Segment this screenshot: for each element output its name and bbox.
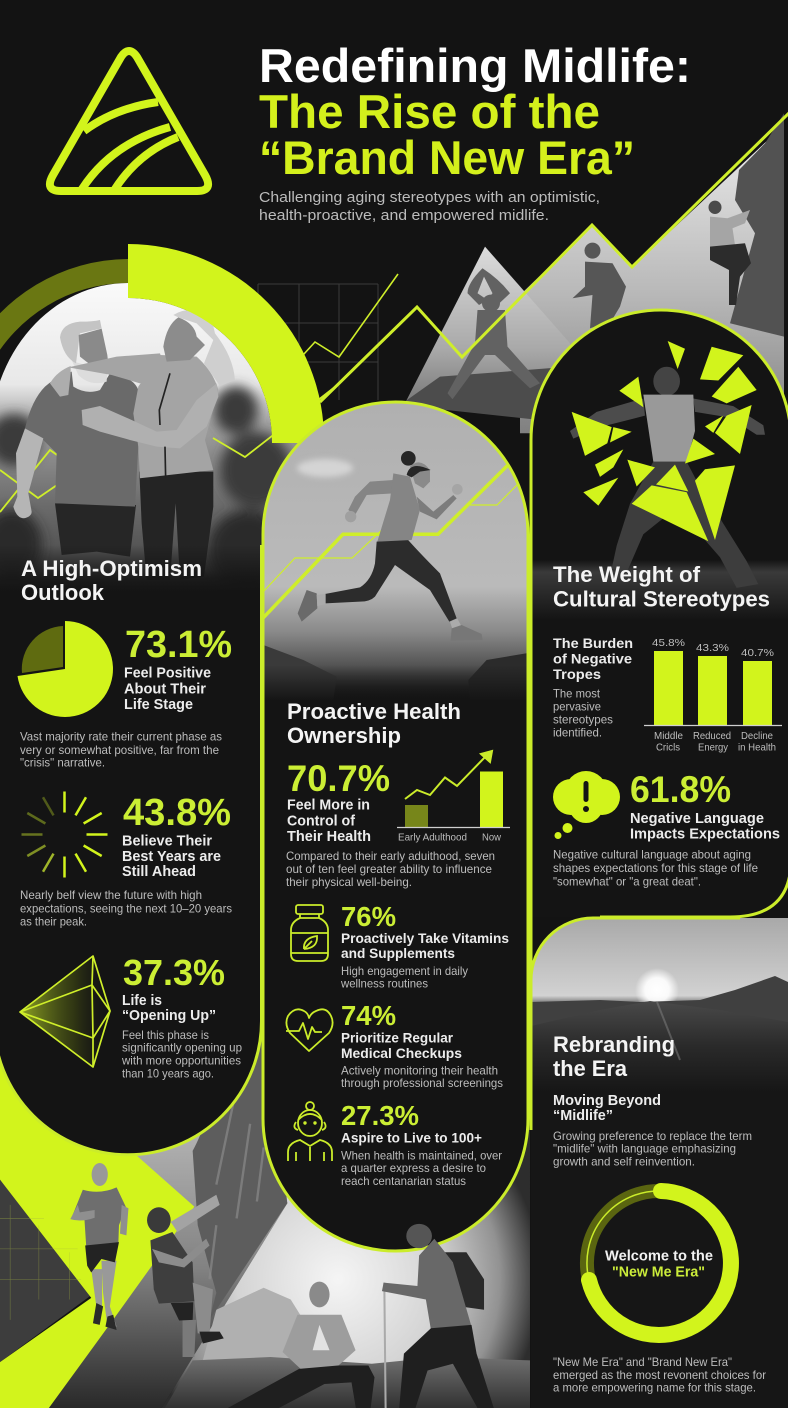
optimism ring lime arc: [128, 244, 324, 443]
man's face: [79, 329, 108, 368]
panel border: [531, 310, 788, 1130]
ring: welcome to the new me era: "New Me Era": [612, 1264, 705, 1281]
panel border: [263, 402, 528, 1251]
ring: welcome to the new me era: [587, 1191, 731, 1335]
heading: Cultural Stereotypes: [553, 586, 770, 612]
woman's jacket: [133, 355, 218, 478]
stat 27.3%: 27.3%: [341, 1100, 419, 1131]
illustration: figure breaking shards: [570, 341, 765, 588]
panel: the weight of cultural stereotypes: [530, 308, 788, 980]
woman's hand on shoulder: [50, 366, 71, 397]
stat 37.3%: Life is: [122, 992, 162, 1009]
stat 37.3%: 37.3%: [123, 952, 225, 993]
bar chart: tropes: 40.7%: [741, 647, 774, 659]
text: burden of negative tropes: Tropes: [553, 666, 601, 682]
heading: [21, 556, 202, 605]
bar chart: tropes: Decline: [741, 730, 773, 742]
stat 43.8%: [20, 792, 232, 928]
stat 43.8%: Still Ahead: [122, 863, 196, 880]
lime chevron: [0, 1016, 194, 1408]
heading: Outlook: [21, 580, 105, 605]
stat 43.8%: 43.8%: [123, 792, 231, 834]
yoga peak: [405, 247, 570, 420]
text: moving beyond midlife: Moving Beyond: [553, 1092, 661, 1109]
woman's upper arm: [68, 353, 167, 383]
stat 61.8%: [553, 769, 780, 889]
stat 37.3%: than 10 years ago.: [122, 1066, 214, 1080]
stat 27.3%: [341, 1100, 502, 1188]
stat 74%: Prioritize Regular: [341, 1030, 454, 1046]
text: burden of negative tropes: pervasive: [553, 700, 601, 714]
text: moving beyond midlife: [553, 1092, 752, 1169]
stat 61.8%: Negative Language: [630, 810, 764, 827]
heading: Ownership: [287, 723, 401, 748]
panel: proactive health ownership: [263, 402, 528, 1251]
title: Redefining Midlife:: [259, 39, 691, 92]
distant peak: [203, 1288, 338, 1360]
bar chart: tropes: Middle: [654, 730, 683, 742]
dark fade below photo: [0, 545, 261, 593]
photo lime lines: [263, 465, 517, 618]
body: control of health: Compared to their early aduithood, seven: [286, 849, 495, 863]
stat 76%: Proactively Take Vitamins: [341, 930, 509, 946]
text: closing note: a more empowering name for this stage.: [553, 1381, 756, 1395]
text: moving beyond midlife: growth and self reinvention.: [553, 1155, 695, 1169]
stat 61.8%: Impacts Expectations: [630, 826, 780, 843]
bar chart: tropes: 45.8%: [652, 637, 685, 649]
yoga figure: [448, 268, 540, 399]
man's shirt: [25, 372, 138, 507]
zipper: [159, 373, 170, 478]
rocks: [264, 646, 330, 674]
stat 76%: 76%: [341, 901, 396, 932]
stat 61.8%: "somewhat" or "a great deat".: [553, 875, 701, 889]
stage floor: [532, 562, 788, 610]
hiker overlapping center panel: [406, 1224, 453, 1266]
icon: sunburst rays: [22, 792, 108, 878]
photo zigzag lines: [0, 383, 340, 512]
figure: [570, 367, 765, 588]
stat 70.7%: Control of: [287, 813, 356, 830]
stat 76%: High engagement in daily: [341, 964, 468, 978]
heading: Proactive Health: [287, 699, 461, 724]
stat 43.8%: Believe Their: [122, 832, 212, 850]
bar chart: tropes: Energy: [698, 742, 729, 754]
text: burden of negative tropes: The Burden: [553, 635, 633, 651]
wedge grid: [0, 1205, 81, 1320]
heading: Rebranding: [553, 1032, 675, 1057]
foreground ridges: [162, 1357, 530, 1408]
hiker figure in header: [572, 243, 626, 328]
woman's hair: [173, 310, 235, 386]
icon: heart pulse: [286, 1009, 333, 1051]
title: [259, 39, 691, 184]
stat 74%: 74%: [341, 1000, 396, 1031]
stat 27.3%: a quarter express a desire to: [341, 1161, 486, 1175]
climber figure: [708, 201, 751, 305]
text: burden of negative tropes: The most: [553, 687, 601, 701]
subtitle: health-proactive, and empowered midlife.: [259, 207, 549, 224]
stat 43.8%: Best Years are: [122, 848, 221, 865]
rock wall: [193, 1022, 287, 1320]
photo: couple scene: [0, 283, 298, 578]
stat 27.3%: When health is maintained, over: [341, 1149, 502, 1163]
stat 70.7%: 70.7%: [287, 758, 390, 799]
heading: [553, 1032, 675, 1081]
heading: The Weight of: [553, 562, 701, 587]
stat 43.8%: Nearly belf view the future with high: [20, 888, 202, 902]
stat 70.7%: Their Health: [287, 828, 371, 845]
runner: [70, 1163, 128, 1330]
stat 61.8%: 61.8%: [630, 769, 731, 810]
stat 73.1%: very or somewhat positive, far from the: [20, 743, 219, 757]
bar chart: tropes: Reduced: [693, 730, 731, 742]
trend arrow: [405, 751, 492, 799]
bar chart: tropes: Cricls: [656, 742, 680, 754]
photo wedge: [0, 1180, 101, 1362]
zigzag growth line: [320, 112, 788, 402]
rising thin line: [213, 274, 398, 453]
panel: a high-optimism outlook: [0, 244, 340, 1155]
ring: welcome to the new me era: Welcome to the: [605, 1248, 713, 1265]
stat 73.1%: Life Stage: [124, 696, 193, 713]
stat 61.8%: Negative cultural language about aging: [553, 848, 751, 862]
text: burden of negative tropes: identified.: [553, 726, 602, 740]
text: moving beyond midlife: "midlife" with language emphasizing: [553, 1142, 736, 1156]
bright sunset sky: [159, 1110, 530, 1408]
stat 37.3%: with more opportunities: [121, 1054, 241, 1068]
optimism ring olive track: [0, 259, 128, 366]
heading: the Era: [553, 1056, 628, 1081]
panel border arc: [531, 918, 740, 1130]
photo: runner: [263, 402, 528, 701]
bar chart: early adulthood vs now: Now: [482, 832, 501, 844]
text: closing note: emerged as the most revonent choices for: [553, 1368, 766, 1382]
text: burden of negative tropes: of Negative: [553, 651, 632, 667]
photo: sunrise over mountains: [532, 918, 788, 1074]
heading: A High-Optimism: [21, 556, 202, 581]
rock face: [730, 113, 784, 337]
stat 61.8%: shapes expectations for this stage of life: [553, 861, 758, 875]
man's beard and neck: [72, 360, 108, 383]
text: burden of negative tropes: [553, 635, 633, 740]
dim mountain backdrop: [44, 1124, 287, 1408]
woman's leggings: [139, 472, 213, 580]
panel body: [0, 592, 262, 1155]
stat 37.3%: [121, 952, 242, 1080]
chart grid: [258, 284, 378, 400]
heading: [287, 699, 461, 748]
panel border: [0, 545, 262, 1155]
bar chart: tropes: 43.3%: [696, 642, 729, 654]
stat 73.1%: "crisis" narrative.: [20, 756, 105, 770]
title: The Rise of the: [259, 85, 600, 138]
icon: thought bubble with exclamation: [553, 771, 620, 839]
sky behind zigzag: [520, 125, 784, 433]
stat 76%: and Supplements: [341, 945, 455, 961]
text: burden of negative tropes: stereotypes: [553, 713, 613, 727]
bar chart: early adulthood vs now: [397, 751, 510, 844]
stat 74%: through professional screenings: [341, 1076, 503, 1090]
stat 74%: Medical Checkups: [341, 1045, 462, 1061]
panel background: [531, 918, 788, 1408]
body: control of health: out of ten feel greater ability to influence: [286, 862, 492, 876]
stat 70.7%: Feel More in: [287, 797, 370, 814]
hiker: [382, 1224, 495, 1408]
panel body: [263, 402, 528, 1251]
yoga figure: [220, 1282, 375, 1408]
bottom activity collage: [0, 1016, 530, 1408]
panel body: [531, 310, 788, 1130]
man's arm: [13, 428, 43, 518]
stat 37.3%: “Opening Up”: [122, 1007, 216, 1024]
stat 73.1%: 73.1%: [125, 624, 232, 666]
icon: crystal gem: [20, 956, 110, 1067]
man's shorts: [55, 503, 136, 557]
figure: [348, 480, 393, 515]
stat 74%: [341, 1000, 503, 1090]
rock streaks: [210, 1104, 264, 1279]
pie chart 73.1%: [18, 621, 113, 717]
text: closing note: "New Me Era" and "Brand New Era": [553, 1355, 732, 1369]
trekking pole: [384, 1283, 386, 1408]
stat 43.8%: as their peak.: [20, 914, 87, 928]
stat 76%: wellness routines: [340, 976, 428, 990]
stat 27.3%: Aspire to Live to 100+: [341, 1130, 482, 1146]
header mountain collage: [400, 113, 784, 433]
icon: supplement bottle: [291, 905, 328, 961]
man's hair: [60, 320, 102, 363]
stat 43.8%: expectations, seeing the next 10–20 years: [20, 902, 232, 916]
couple: [13, 310, 235, 580]
stat 76%: [340, 901, 509, 990]
text: closing note: [553, 1355, 766, 1395]
stat 73.1%: About Their: [124, 680, 206, 698]
stat 74%: Actively monitoring their health: [341, 1064, 498, 1078]
subtitle: Challenging aging stereotypes with an optimistic,: [259, 189, 600, 206]
woman's face: [163, 317, 205, 362]
body: control of health: their physical well-being.: [286, 875, 412, 889]
bar chart: early adulthood vs now: Early Adulthood: [398, 832, 467, 844]
stat 73.1%: Vast majority rate their current phase as: [20, 730, 222, 744]
shards: [572, 341, 757, 541]
text: moving beyond midlife: “Midlife”: [553, 1107, 613, 1124]
climber: [147, 1195, 224, 1357]
icon: older person: [288, 1102, 332, 1161]
woman's arm across: [82, 383, 218, 448]
bar chart: tropes: in Health: [738, 742, 776, 754]
bar chart: tropes: [644, 637, 782, 754]
ground: [400, 367, 570, 423]
stat 70.7%: [287, 758, 390, 845]
title: “Brand New Era”: [259, 131, 635, 184]
body: control of health: [286, 849, 495, 889]
subtitle: [259, 189, 600, 224]
panel: rebranding the era: [531, 917, 788, 1408]
text: moving beyond midlife: Growing preference to replace the term: [553, 1129, 752, 1143]
logo: [50, 51, 208, 191]
stat 73.1%: [20, 624, 232, 770]
stat 73.1%: Feel Positive: [124, 664, 211, 682]
stat 37.3%: Feel this phase is: [122, 1028, 209, 1042]
stat 37.3%: significantly opening up: [122, 1041, 242, 1055]
heading: [553, 562, 770, 612]
stat 27.3%: reach centanarian status: [341, 1174, 466, 1188]
